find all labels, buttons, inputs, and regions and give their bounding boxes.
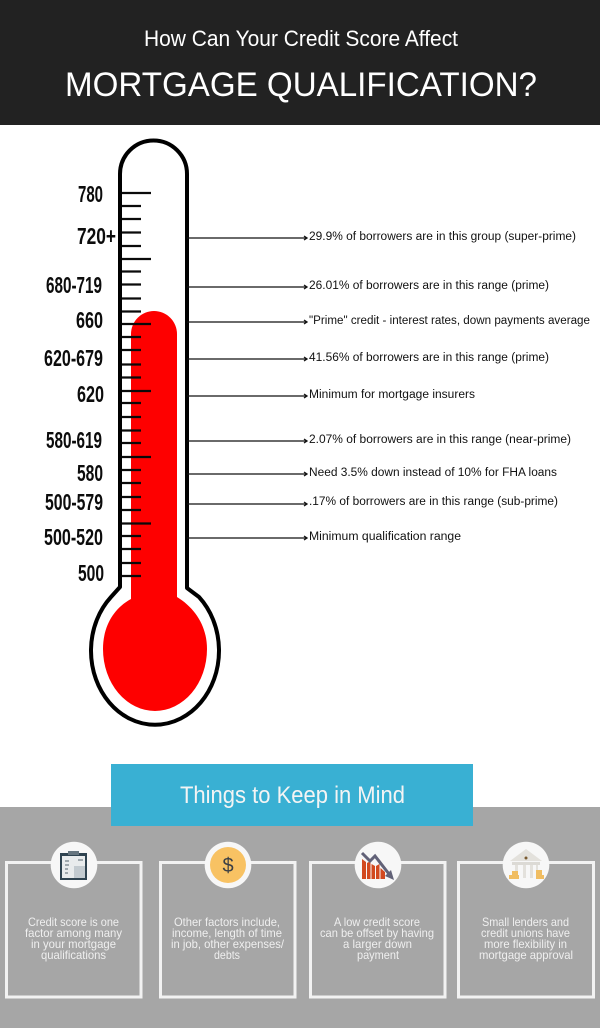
card 1 text [25, 915, 122, 962]
thermometer [91, 140, 219, 725]
annotation text: "Prime" credit - interest rates, down payments average [309, 315, 590, 327]
icon: clipboard [60, 851, 87, 880]
annotation arrows [187, 236, 307, 540]
card 4 text: mortgage approval [479, 948, 573, 962]
card 4 text: credit unions have [481, 926, 570, 940]
annotation text: Minimum qualification range [309, 531, 461, 543]
tick marks [122, 193, 151, 576]
annotation text: 41.56% of borrowers are in this range (prime) [309, 352, 549, 364]
annotation text: 26.01% of borrowers are in this range (prime) [309, 280, 549, 292]
card 2 [160, 842, 295, 997]
red mercury [103, 311, 207, 711]
card 3 text [320, 915, 434, 962]
annotation text: .17% of borrowers are in this range (sub-prime) [309, 496, 558, 508]
header [0, 0, 600, 125]
card 3 text: can be offset by having [320, 926, 434, 940]
card 4 text [479, 915, 573, 962]
score labels: 500-520 [44, 524, 103, 550]
banner: things to keep in mind [111, 764, 473, 826]
card 1 text: qualifications [41, 948, 106, 962]
score labels: 720+ [77, 223, 116, 249]
icon: dollar coin [210, 847, 246, 883]
card 2 text: in job, other expenses/ [171, 937, 285, 951]
score labels: 660 [76, 307, 103, 333]
annotation text [309, 231, 590, 543]
card 2 text [171, 915, 285, 962]
card 3 text: payment [357, 948, 400, 962]
annotation text: Minimum for mortgage insurers [309, 389, 475, 401]
score labels [44, 181, 116, 586]
annotation text: Need 3.5% down instead of 10% for FHA loans [309, 467, 557, 479]
score labels: 780 [78, 181, 103, 207]
thermometer outline [91, 140, 219, 725]
annotation text: 2.07% of borrowers are in this range (near-prime) [309, 434, 571, 446]
score labels: 500 [78, 560, 104, 586]
card 1 text: factor among many [25, 926, 122, 940]
gray footer background [0, 807, 600, 1028]
card 1 text: Credit score is one [28, 915, 119, 929]
banner: things to keep in mind: Things to Keep in Mind [180, 782, 405, 809]
card 2 text: income, length of time [172, 926, 282, 940]
score labels: 620 [77, 381, 104, 407]
card 2 text: debts [214, 948, 240, 962]
score labels: 580-619 [46, 427, 102, 453]
card 2 text: Other factors include, [174, 915, 280, 929]
card 4 text: Small lenders and [482, 915, 569, 929]
card 3 text: a larger down [343, 937, 412, 951]
icon: bank with coins [509, 849, 544, 879]
icon: dollar coin: $ [222, 855, 234, 877]
card 1 [6, 842, 141, 997]
title line 2: MORTGAGE QUALIFICATION? [65, 66, 537, 104]
icon: falling chart [362, 853, 394, 880]
card 4 [458, 842, 594, 997]
score labels: 620-679 [44, 345, 103, 371]
title line 1: How Can Your Credit Score Affect [144, 26, 458, 51]
score labels: 500-579 [45, 489, 103, 515]
score labels: 580 [77, 460, 103, 486]
card 1 text: in your mortgage [31, 937, 116, 951]
score labels: 680-719 [46, 272, 102, 298]
annotation text: 29.9% of borrowers are in this group (super-prime) [309, 231, 576, 243]
card 4 text: more flexibility in [484, 937, 567, 951]
card 3 [310, 842, 445, 997]
card 3 text: A low credit score [334, 915, 420, 929]
